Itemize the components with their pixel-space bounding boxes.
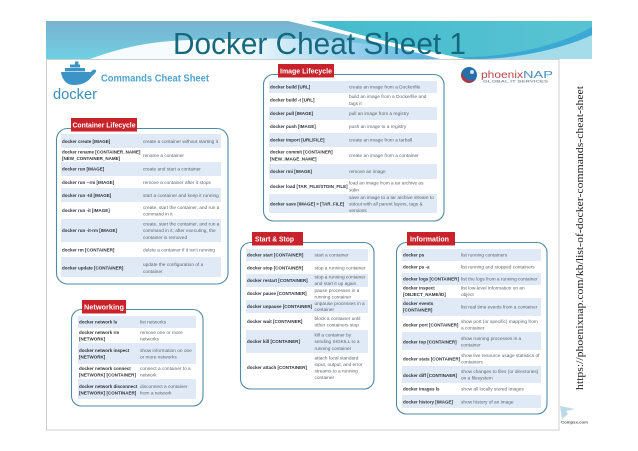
table: information commands: list real time events from a container bbox=[461, 304, 538, 310]
table: start and stop commands: pause processes in a bbox=[314, 288, 360, 294]
icon: docker whale logo: docker bbox=[53, 86, 97, 103]
table: container lifecycle commands: rename a container bbox=[143, 153, 184, 159]
table: start and stop commands: attach local standard bbox=[314, 356, 359, 362]
table: image lifecycle commands: docker build -t [URL] bbox=[270, 98, 315, 102]
title: Docker Cheat Sheet 1 bbox=[173, 26, 466, 61]
vertical source url: https://phoenixnap.com/kb/list-of-docker-commands-cheat-sheet bbox=[574, 86, 586, 390]
table: information commands: docker ps -a bbox=[403, 264, 430, 270]
table: image lifecycle commands: docker push [IMAGE] bbox=[270, 124, 316, 129]
table: start and stop commands bbox=[246, 249, 368, 381]
table: information commands: on a filesystem bbox=[461, 376, 493, 382]
table: networking commands: disconnect a container bbox=[140, 384, 188, 390]
table: image lifecycle commands: load an image from a tar archive as bbox=[349, 180, 424, 186]
table: information commands bbox=[402, 249, 541, 408]
table: networking commands: docker network inspect bbox=[79, 348, 130, 353]
table: information commands: object bbox=[461, 292, 474, 298]
table: information commands: docker history [IMAGE] bbox=[403, 400, 454, 404]
table: information commands: a container bbox=[461, 326, 485, 332]
table: start and stop commands: docker unpause [CONTAINER] bbox=[247, 304, 313, 309]
table: networking commands: from a network bbox=[140, 390, 172, 396]
table: networking commands: list networks bbox=[140, 320, 167, 326]
table: networking commands: docker network connect bbox=[79, 366, 131, 371]
table: container lifecycle commands: create and start a container bbox=[143, 166, 201, 172]
table: start and stop commands: stop a running container bbox=[314, 266, 366, 272]
label: information: Information bbox=[410, 234, 449, 244]
table: networking commands: or more networks bbox=[140, 354, 177, 360]
table: container lifecycle commands: docker rename [CONTAINER_NAME] bbox=[62, 150, 141, 154]
table: container lifecycle commands: container bbox=[143, 269, 163, 275]
table: image lifecycle commands bbox=[269, 81, 437, 214]
table: information commands: show live resource usage statistics of bbox=[461, 353, 540, 359]
table: image lifecycle commands: pull an image from a registry bbox=[349, 111, 410, 117]
table: container lifecycle commands: docker rm [CONTAINER] bbox=[62, 248, 115, 252]
table: container lifecycle commands: create, start the container, and run a bbox=[143, 205, 220, 211]
table: information commands: list the logs from a running container bbox=[461, 276, 538, 282]
table: image lifecycle commands: docker save [IMAGE] > [TAR_FILE] bbox=[270, 202, 345, 206]
table: start and stop commands: running container bbox=[314, 294, 352, 300]
table: information commands: docker stats [CONTAINER] bbox=[403, 356, 461, 362]
table: container lifecycle commands: create a container without starting it bbox=[143, 139, 219, 145]
table: image lifecycle commands: create an image from a Dockerfile bbox=[349, 84, 421, 90]
table: image lifecycle commands: build an image from a Dockerfile and bbox=[349, 94, 427, 100]
label: container lifecycle: Container Lifecycle bbox=[72, 120, 136, 130]
label: container lifecycle bbox=[71, 118, 137, 132]
panel: container lifecycle bbox=[56, 118, 228, 284]
table: networking commands: connect a container to a bbox=[140, 366, 191, 372]
table: start and stop commands: running container bbox=[314, 346, 352, 352]
table: start and stop commands: other containers stop bbox=[314, 322, 359, 328]
panel: information bbox=[396, 232, 547, 414]
table: start and stop commands: docker kill [CONTAINER] bbox=[247, 339, 300, 344]
panel: start and stop bbox=[240, 232, 374, 389]
icon: compgo watermark: Compsx.com bbox=[561, 420, 588, 424]
table: start and stop commands: container bbox=[314, 375, 334, 381]
logo: phoenixNAP: GLOBAL IT SERVICES bbox=[483, 80, 549, 84]
table: image lifecycle commands: docker pull [IMAGE] bbox=[270, 111, 314, 116]
table: image lifecycle commands: docker import [URL/FILE] bbox=[270, 138, 325, 142]
table: information commands: [OBJECT_NAME/ID] bbox=[403, 292, 446, 297]
table: networking commands: show information on one bbox=[140, 348, 192, 354]
table: container lifecycle commands: docker run --rm [IMAGE] bbox=[62, 180, 115, 185]
table: information commands: docker port [CONTAINER] bbox=[403, 322, 459, 328]
table: information commands: docker images ls bbox=[403, 386, 440, 392]
table: image lifecycle commands: tags it bbox=[349, 101, 362, 107]
table: start and stop commands: sending SIGKILL to a bbox=[314, 339, 360, 345]
table: information commands: list running containers bbox=[461, 252, 508, 258]
heading: commands cheat sheet: Commands Cheat Sheet bbox=[101, 72, 209, 84]
table: container lifecycle commands: docker run -it-rm [IMAGE] bbox=[62, 228, 118, 233]
table: image lifecycle commands: docker rmi [IMAGE] bbox=[270, 169, 313, 174]
table: information commands: list running and stopped containers bbox=[461, 264, 535, 270]
label: start and stop: Start & Stop bbox=[255, 234, 294, 244]
table: start and stop commands: input, output, and error bbox=[314, 362, 363, 368]
table: container lifecycle commands: delete a container if it isn't running bbox=[143, 248, 215, 254]
table: networking commands bbox=[78, 316, 196, 399]
table: start and stop commands: docker stop [CONTAINER] bbox=[247, 266, 304, 270]
table: image lifecycle commands: stdin bbox=[349, 188, 359, 194]
table: container lifecycle commands: start a container and keep it running bbox=[143, 193, 219, 199]
table: start and stop commands: kill a container by bbox=[314, 332, 352, 338]
table: container lifecycle commands: command in it; after executing, the bbox=[143, 228, 216, 234]
table: information commands: list low-level information on an bbox=[461, 286, 525, 292]
label: image lifecycle bbox=[278, 64, 334, 78]
table: container lifecycle commands: update the configuration of a bbox=[143, 262, 204, 268]
table: information commands: show port (or specific) mapping from bbox=[461, 319, 538, 325]
table: image lifecycle commands: stdout with all parent layers, tags & bbox=[349, 202, 423, 208]
table: image lifecycle commands: docker build [URL] bbox=[270, 84, 311, 90]
table: start and stop commands: unpause processes in a bbox=[314, 301, 365, 307]
table: start and stop commands: docker attach [CONTAINER] bbox=[247, 365, 307, 370]
table: image lifecycle commands: docker load [TAR_FILE/STDIN_FILE] bbox=[270, 184, 348, 189]
table: start and stop commands: streams to a running bbox=[314, 368, 358, 374]
table: start and stop commands: docker restart [CONTAINER] bbox=[247, 278, 308, 283]
table: image lifecycle commands: create an image from a container bbox=[349, 153, 419, 159]
table: information commands: docker events bbox=[403, 301, 434, 306]
table: information commands: [CONTAINER] bbox=[403, 308, 433, 312]
table: container lifecycle commands: docker run [IMAGE] bbox=[62, 166, 105, 172]
cheat sheet page bbox=[46, 60, 559, 430]
table: container lifecycle commands: [NEW_CONTAINER_NAME] bbox=[62, 156, 121, 161]
table: networking commands: network bbox=[140, 372, 157, 378]
table: information commands: docker top [CONTAINER] bbox=[403, 340, 457, 344]
table: networking commands: docker network rm bbox=[79, 330, 119, 335]
label: image lifecycle: Image Lifecycle bbox=[280, 66, 332, 76]
table: container lifecycle commands: docker run -it [IMAGE] bbox=[62, 208, 110, 213]
table: container lifecycle commands: create, start the container, and run a bbox=[143, 222, 220, 228]
table: image lifecycle commands: remove an image bbox=[349, 169, 386, 175]
label: networking: Networking bbox=[84, 302, 124, 312]
table: networking commands: networks bbox=[140, 336, 160, 342]
table: container lifecycle commands: command in it bbox=[143, 212, 173, 218]
table: image lifecycle commands: [NEW_IMAGE_NAME] bbox=[270, 156, 317, 162]
icon: compgo watermark bbox=[560, 406, 588, 424]
table: container lifecycle commands: remove a container after it stops bbox=[143, 180, 211, 186]
header banner bbox=[46, 21, 592, 59]
table: information commands: show changes to files (or directories) bbox=[461, 369, 539, 375]
logo: phoenixNAP: NAP bbox=[523, 69, 553, 81]
table: networking commands: docker network disconnect bbox=[79, 384, 138, 389]
table: container lifecycle commands bbox=[61, 134, 221, 277]
table: start and stop commands: block a container until bbox=[314, 316, 360, 322]
table: start and stop commands: start a container bbox=[314, 252, 349, 258]
table: networking commands: [NETWORK] bbox=[79, 354, 106, 360]
table: image lifecycle commands: docker commit [CONTAINER] bbox=[270, 150, 333, 154]
table: start and stop commands: docker start [CONTAINER] bbox=[247, 252, 304, 258]
icon: docker whale logo bbox=[53, 62, 97, 103]
label: start and stop bbox=[252, 232, 303, 246]
table: container lifecycle commands: docker create [IMAGE] bbox=[62, 139, 111, 144]
panel: networking bbox=[72, 300, 203, 406]
table: start and stop commands: and start it up again bbox=[314, 281, 357, 287]
logo: phoenixNAP: phoenix bbox=[481, 69, 524, 81]
table: start and stop commands: stop a running container bbox=[314, 274, 366, 280]
table: information commands: container bbox=[461, 342, 481, 348]
table: image lifecycle commands: push an image to a registry bbox=[349, 124, 407, 130]
table: networking commands: [NETWORK] [CONTINAER] bbox=[79, 390, 137, 396]
table: information commands: docker ps bbox=[403, 252, 425, 258]
table: container lifecycle commands: docker run -td [IMAGE] bbox=[62, 193, 112, 198]
table: information commands: docker logs [CONTAINER] bbox=[403, 276, 459, 282]
table: information commands: docker inspect bbox=[403, 286, 435, 290]
logo: phoenixNAP bbox=[461, 67, 553, 84]
table: start and stop commands: docker pause [CONTAINER] bbox=[247, 291, 307, 296]
table: container lifecycle commands: container is removed bbox=[143, 235, 187, 241]
table: start and stop commands: docker wait [CONTAINER] bbox=[247, 319, 303, 324]
table: information commands: show all locally stored images bbox=[461, 386, 524, 392]
table: networking commands: docker network ls bbox=[79, 320, 118, 324]
table: networking commands: [NETWORK] [CONTAINER] bbox=[79, 372, 136, 378]
table: information commands: containers bbox=[461, 360, 484, 366]
panel: image lifecycle bbox=[264, 64, 444, 221]
label: information bbox=[407, 232, 455, 246]
table: image lifecycle commands: versions bbox=[349, 208, 367, 214]
table: image lifecycle commands: create an image from a tarball bbox=[349, 138, 412, 144]
table: information commands: show history of an image bbox=[461, 400, 514, 406]
table: networking commands: [NETWORK] bbox=[79, 336, 106, 342]
table: information commands: docker diff [CONTINAER] bbox=[403, 373, 458, 378]
table: start and stop commands: container bbox=[314, 307, 334, 313]
table: information commands: show running processes in a bbox=[461, 336, 522, 342]
table: networking commands: remove one or more bbox=[140, 330, 183, 336]
table: image lifecycle commands: save an image to a tar archive stream to bbox=[349, 195, 434, 201]
table: container lifecycle commands: docker update [CONTAINER] bbox=[62, 266, 124, 270]
